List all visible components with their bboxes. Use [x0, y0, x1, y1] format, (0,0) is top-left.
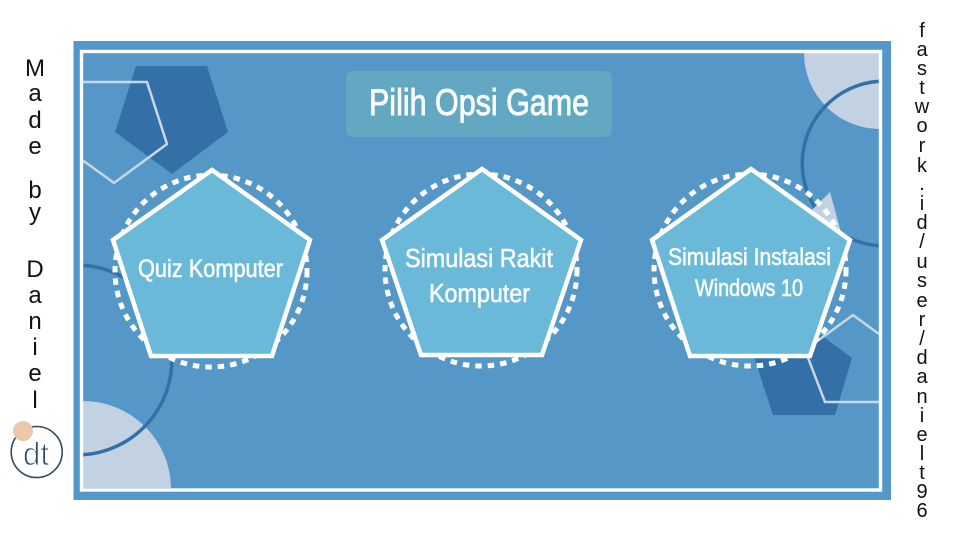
inner white frame [82, 52, 880, 490]
option: Simulasi Instalasi Windows 10 [652, 169, 850, 366]
title [346, 71, 612, 137]
decor: dark pentagon bottom right [750, 312, 852, 415]
logo: dt [11, 421, 62, 478]
decor: outline pentagon bottom right [805, 315, 879, 402]
option: Simulasi Instalasi Windows 10: Simulasi Instalasi [668, 244, 831, 271]
title: Pilih Opsi Game [369, 82, 589, 123]
decor: outline pentagon top left [83, 82, 167, 183]
option: Quiz Komputer: Quiz Komputer [138, 255, 283, 283]
option: Simulasi Instalasi Windows 10: Windows 10 [695, 275, 803, 302]
option: Simulasi Rakit Komputer [382, 169, 581, 366]
panel: game menu background [74, 41, 891, 500]
decor: light shape behind third pentagon [800, 192, 842, 236]
decorative shapes inside the frame [83, 53, 879, 488]
decor: light circle top right [804, 53, 879, 129]
vertical credit left: Made by Daniel [25, 55, 45, 414]
decor: dark pentagon top left [115, 66, 228, 174]
decor: light circle bottom left [83, 401, 171, 488]
option: Simulasi Rakit Komputer: Simulasi Rakit [405, 243, 554, 273]
option: Quiz Komputer [113, 170, 310, 367]
decor: dark ring right [802, 81, 879, 246]
vertical credit right: fastwork .id/user/danielt96 [914, 20, 930, 522]
logo: dt: dt [23, 436, 49, 472]
option: Simulasi Rakit Komputer: Komputer [429, 278, 530, 308]
decor: dark ring left [83, 265, 172, 455]
